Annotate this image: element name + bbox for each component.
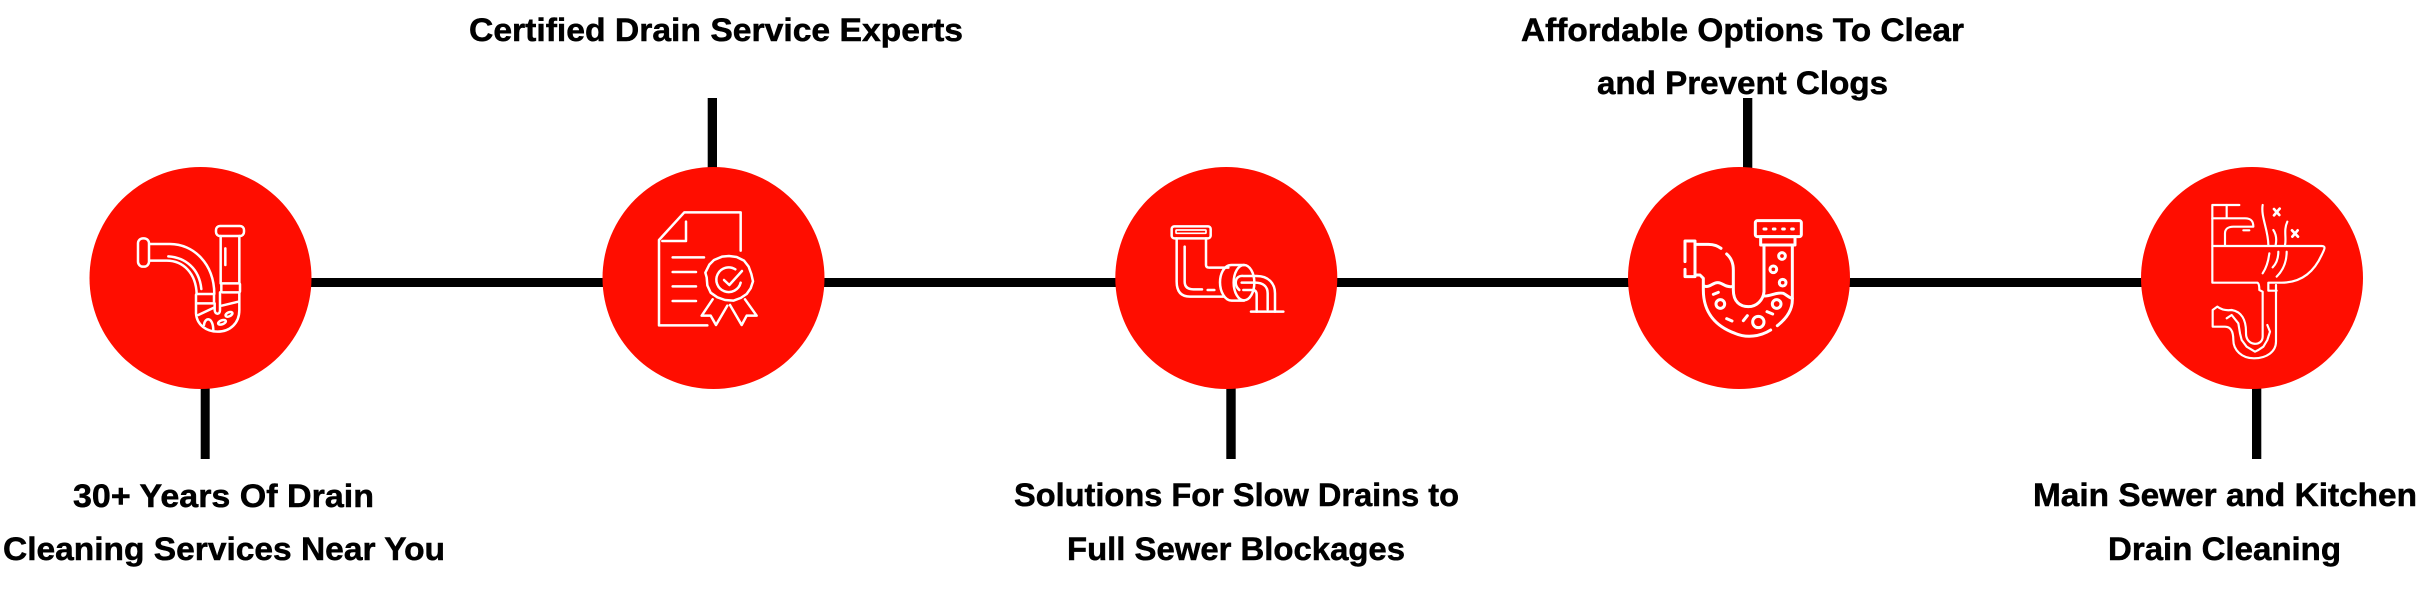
- panel: step 5: [2033, 167, 2417, 567]
- connector stem: [1743, 98, 1752, 172]
- panel: step 2: [469, 12, 963, 389]
- label line 2: Drain Cleaning: [2108, 531, 2341, 567]
- panel: step 1: [3, 167, 445, 567]
- icon: smelly sink drain: [2212, 205, 2325, 358]
- icon: outlet pipe: [1172, 226, 1283, 312]
- label: Affordable Options To Clear: [1521, 12, 1964, 48]
- circle: [1115, 167, 1337, 389]
- label line 2: and Prevent Clogs: [1597, 65, 1888, 101]
- circle: [1628, 167, 1850, 389]
- timeline connector: [300, 278, 2150, 287]
- circle: [602, 167, 824, 389]
- connector stem: [201, 385, 210, 459]
- circle: [2141, 167, 2363, 389]
- label line 2: Cleaning Services Near You: [3, 531, 445, 567]
- connector stem: [2252, 385, 2261, 459]
- label: Solutions For Slow Drains to: [1014, 477, 1459, 513]
- label line 2: Full Sewer Blockages: [1067, 531, 1405, 567]
- icon: certificate document: [659, 212, 757, 325]
- panel: step 3: [1014, 167, 1459, 567]
- connector stem: [708, 98, 717, 172]
- icon: bent pipe with clog: [138, 226, 244, 332]
- label: Certified Drain Service Experts: [469, 12, 963, 48]
- icon: clogged U-trap: [1685, 221, 1801, 336]
- connector stem: [1226, 385, 1236, 459]
- label: 30+ Years Of Drain: [73, 478, 374, 514]
- circle: [90, 167, 312, 389]
- label: Main Sewer and Kitchen: [2033, 477, 2417, 513]
- panel: step 4: [1521, 12, 1964, 389]
